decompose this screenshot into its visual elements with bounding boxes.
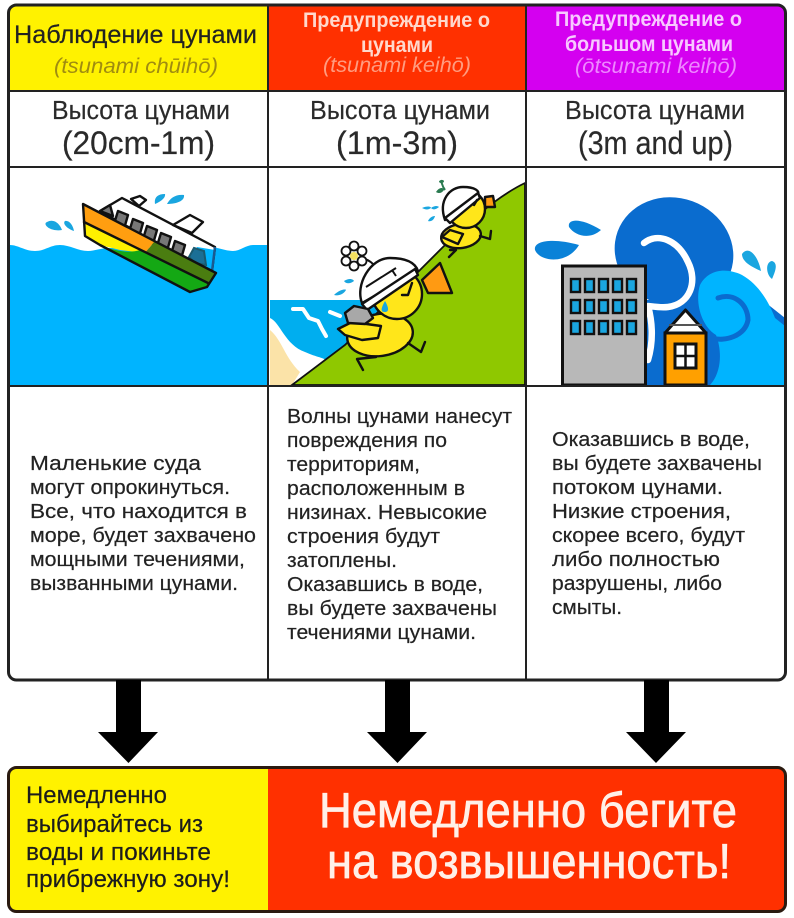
panel: major tsunami warning header: Предупреждение о — [555, 8, 742, 31]
panel: tsunami warning header — [268, 6, 526, 91]
panel: major tsunami warning header: (ōtsunami keihō) — [575, 55, 737, 78]
panel: table grid — [8, 5, 786, 680]
illustration: chicks climbing a hill — [270, 180, 525, 385]
text: column 2 description: затоплены. — [287, 550, 397, 572]
text: column 1 description: Маленькие суда — [30, 453, 202, 475]
arrow: column 2 down — [367, 680, 427, 763]
text: wave height 3m and up: Высота цунами — [565, 97, 745, 125]
panel: action bar — [8, 768, 786, 912]
text: wave height 1m-3m — [310, 97, 490, 161]
text: wave height 1m-3m: Высота цунами — [310, 97, 490, 125]
panel: tsunami warning header: Предупреждение о — [303, 9, 490, 32]
panel: tsunami advisory header — [9, 6, 268, 91]
text: column 2 description — [287, 406, 512, 644]
panel: tsunami warning header: цунами — [361, 34, 433, 57]
panel: leave the water: Немедленно — [26, 782, 167, 809]
arrow: column 3 down — [626, 680, 686, 763]
panel: tsunami advisory header: (tsunami chūihō) — [54, 55, 218, 78]
text: column 1 description: море, будет захвачено — [30, 525, 256, 547]
text: wave height 3m and up — [565, 97, 745, 161]
text: wave height 20cm-1m: (20cm-1m) — [62, 125, 215, 161]
illustration: tsunami wave over buildings — [535, 181, 785, 385]
text: column 2 description: вы будете захвачены — [287, 598, 497, 620]
flower — [342, 242, 366, 270]
panel: tsunami advisory header: Наблюдение цунами — [14, 21, 257, 49]
text: column 3 description: скорее всего, будут — [552, 525, 745, 547]
panel: run to high ground: на возвышенность! — [327, 835, 731, 889]
text: column 2 description: течениями цунами. — [287, 622, 476, 644]
text: column 2 description: низинах. Невысокие — [287, 502, 487, 524]
text: column 2 description: расположенным в — [287, 478, 465, 500]
text: column 3 description: Низкие строения, — [552, 501, 731, 523]
panel: run to high ground: Немедленно бегите — [319, 784, 737, 838]
text: column 1 description: Все, что находится в — [30, 501, 247, 523]
arrow: column 1 down — [98, 680, 158, 763]
text: column 3 description: разрушены, либо — [552, 573, 722, 595]
panel: run to high ground — [268, 768, 785, 911]
chick: small with helmet — [422, 180, 495, 257]
text: column 1 description: вызванными цунами. — [30, 573, 238, 595]
text: column 1 description — [30, 453, 256, 595]
chick: large with helmet — [334, 242, 452, 370]
panel: leave the water: прибрежную зону! — [26, 866, 230, 893]
text: column 3 description — [552, 429, 762, 619]
text: column 1 description: мощными течениями, — [30, 549, 245, 571]
text: column 2 description: Оказавшись в воде, — [287, 574, 483, 596]
text: column 3 description: смыты. — [552, 597, 622, 619]
text: column 2 description: территориям, — [287, 454, 420, 476]
panel: leave the water: воды и покиньте — [26, 839, 211, 866]
text: column 1 description: могут опрокинуться. — [30, 477, 230, 499]
text: wave height 20cm-1m — [52, 97, 230, 161]
panel: major tsunami warning header — [526, 6, 785, 91]
text: column 2 description: повреждения по — [287, 430, 447, 452]
text: column 3 description: либо полностью — [552, 549, 720, 571]
text: column 3 description: вы будете захвачены — [552, 453, 762, 475]
house — [665, 310, 706, 385]
text: column 3 description: Оказавшись в воде, — [552, 429, 750, 451]
building windows — [571, 279, 636, 334]
panel: leave the water — [9, 768, 268, 911]
text: wave height 3m and up: (3m and up) — [578, 125, 733, 161]
text: wave height 20cm-1m: Высота цунами — [52, 97, 230, 125]
text: column 3 description: потоком цунами. — [552, 477, 723, 499]
text: wave height 1m-3m: (1m-3m) — [336, 125, 458, 161]
text: column 2 description: строения будут — [287, 526, 440, 548]
panel: leave the water: выбирайтесь из — [26, 811, 203, 838]
panel: tsunami warning header: (tsunami keihō) — [323, 54, 471, 77]
illustration: capsizing boat — [10, 194, 268, 385]
text: column 2 description: Волны цунами нанесут — [287, 406, 512, 428]
panel: major tsunami warning header: большом цунами — [565, 33, 733, 56]
